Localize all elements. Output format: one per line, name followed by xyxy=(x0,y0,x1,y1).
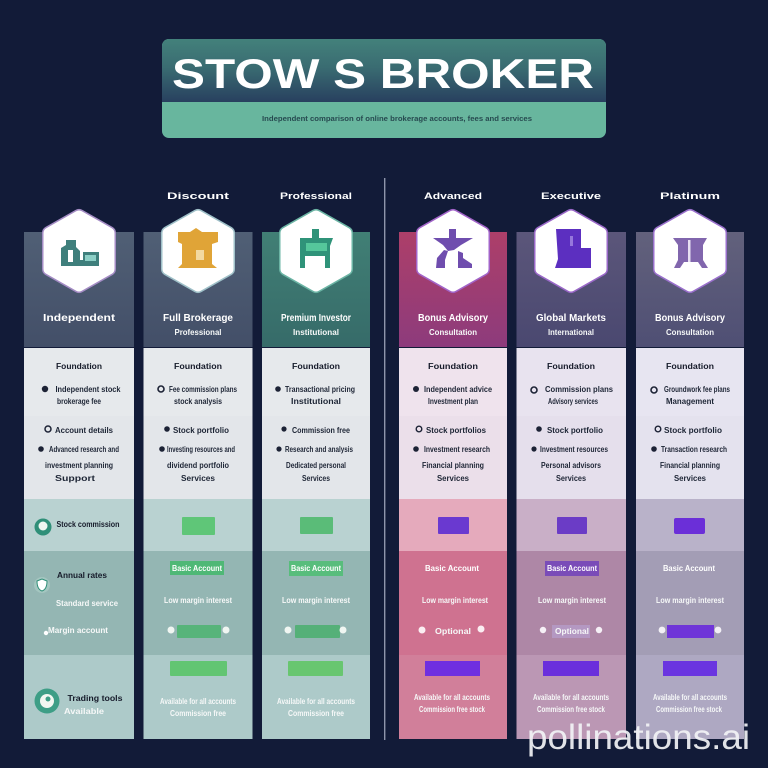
column 2 green badges xyxy=(168,517,230,676)
column 4 header xyxy=(399,232,507,347)
column 5 hexagon icon xyxy=(541,216,601,286)
column 5 badge texts: Commission free stock xyxy=(537,704,605,714)
column 5 texts: International xyxy=(548,327,594,337)
column 4 texts: Stock portfolios xyxy=(426,426,487,435)
column 2 texts: Stock portfolio xyxy=(173,426,229,435)
column 2 row one xyxy=(144,499,252,551)
column 6 badge texts xyxy=(653,564,727,714)
column 6 texts: Bonus Advisory xyxy=(655,313,725,324)
column 3 hexagon icon xyxy=(286,216,346,286)
column 5 texts: Investment resources xyxy=(540,445,608,454)
column 3 badge texts: Commission free xyxy=(288,708,344,718)
column 1 texts: Account details xyxy=(55,426,114,435)
column 4 texts: Independent advice xyxy=(424,385,492,394)
column 2 row two xyxy=(144,551,252,655)
column 1 texts: Trading tools xyxy=(68,694,123,703)
column 4 texts: Consultation xyxy=(429,327,477,337)
column 6 texts xyxy=(651,313,730,483)
column 6 texts: Financial planning xyxy=(660,461,720,470)
column 5 badge texts: Low margin interest xyxy=(538,595,606,605)
column 5 top label: Executive xyxy=(541,191,601,201)
column 3 row one xyxy=(262,499,370,551)
column 2 features xyxy=(144,348,252,499)
column 4 row one xyxy=(399,499,507,551)
column 6 features xyxy=(636,348,744,499)
column 5 texts: Commission plans xyxy=(545,385,614,394)
column 1 texts: Margin account xyxy=(48,625,108,635)
column 5 features xyxy=(516,348,626,499)
column 1 hexagon icon xyxy=(49,216,109,286)
column 4 badge texts: Basic Account xyxy=(425,564,479,573)
column 5 texts: Personal advisors xyxy=(541,461,601,470)
column 3 texts: Institutional xyxy=(293,327,339,337)
column 4 texts xyxy=(413,313,492,483)
column 6 texts: Foundation xyxy=(666,362,714,371)
column 3 badge texts xyxy=(277,564,355,718)
column 6 row one xyxy=(636,499,744,551)
column 4 badge texts xyxy=(414,564,490,714)
column 5 badge texts: Basic Account xyxy=(547,564,597,573)
column 6 badge texts: Basic Account xyxy=(663,564,715,573)
column 3 texts: Foundation xyxy=(292,362,340,371)
column 1 panel xyxy=(24,216,134,739)
column 3 top label: Professional xyxy=(280,191,352,201)
column 1 texts: Stock commission xyxy=(56,520,120,529)
column 1 texts: Independent xyxy=(43,313,116,324)
column 5 header xyxy=(516,232,626,347)
column 6 hexagon icon xyxy=(660,216,720,286)
column 2 texts: dividend portfolio xyxy=(167,461,229,470)
column 5 texts: Global Markets xyxy=(536,313,606,324)
column 6 row three xyxy=(636,655,744,739)
column 2 badge texts: Low margin interest xyxy=(164,595,232,605)
column 1 header xyxy=(24,232,134,347)
column 2 texts: Services xyxy=(181,474,216,483)
column 5 purple badges xyxy=(540,517,602,676)
column 3 panel xyxy=(262,216,370,739)
column 3 badge texts: Low margin interest xyxy=(282,595,350,605)
column 2 texts xyxy=(158,313,237,483)
column 2 top label: Discount xyxy=(167,191,229,201)
column 3 row two xyxy=(262,551,370,655)
column 2 panel xyxy=(144,216,252,739)
column 5 panel xyxy=(516,216,626,739)
column 6 header xyxy=(636,232,744,347)
column 3 texts: Transactional pricing xyxy=(285,385,355,394)
center divider xyxy=(384,178,385,740)
column 1 texts: Foundation xyxy=(56,362,102,371)
column 6 badge texts: Low margin interest xyxy=(656,595,724,605)
column 6 texts: Groundwork fee plans xyxy=(664,385,730,394)
column 3 texts: Commission free xyxy=(292,426,350,435)
column 2 row three xyxy=(144,655,252,739)
column 4 purple badges xyxy=(418,517,484,676)
column 6 row two xyxy=(636,551,744,655)
subtitle: Independent comparison of online brokerage accounts, fees and services xyxy=(262,114,532,123)
column 6 texts: Consultation xyxy=(666,327,714,337)
column 2 texts: Investing resources and xyxy=(167,445,235,454)
column 1 row three xyxy=(24,655,134,739)
column 1 row icons xyxy=(34,518,60,714)
column 1 texts: brokerage fee xyxy=(57,397,101,406)
column 3 texts: Services xyxy=(302,474,330,483)
column 4 texts: Bonus Advisory xyxy=(418,313,488,324)
column 2 badge texts xyxy=(160,564,236,718)
column 6 badge texts: Available for all accounts xyxy=(653,692,727,702)
column 2 badge texts: Available for all accounts xyxy=(160,696,236,706)
column 4 texts: Foundation xyxy=(428,362,478,371)
column 2 texts: stock analysis xyxy=(174,397,222,406)
column 3 badge texts: Available for all accounts xyxy=(277,696,355,706)
column 5 badge texts xyxy=(533,564,609,714)
column 6 top label: Platinum xyxy=(660,191,720,201)
column 3 features xyxy=(262,348,370,499)
column 5 texts: Services xyxy=(556,474,586,483)
column 1 row one xyxy=(24,499,134,551)
column 2 badge texts: Basic Account xyxy=(172,564,222,573)
column 1 texts: Standard service xyxy=(56,598,118,608)
column 5 texts: Advisory services xyxy=(548,397,598,406)
column 2 texts: Foundation xyxy=(174,362,222,371)
title banner xyxy=(162,39,606,138)
column 4 badge texts: Available for all accounts xyxy=(414,692,490,702)
column 4 hexagon icon xyxy=(423,216,483,286)
column 4 panel xyxy=(399,216,507,739)
column 4 texts: Financial planning xyxy=(422,461,484,470)
column 6 texts: Management xyxy=(666,397,714,406)
column 3 texts: Premium Investor xyxy=(281,313,351,324)
column 3 green badges xyxy=(284,517,346,676)
column 3 texts xyxy=(275,313,355,483)
column 2 hexagon icon xyxy=(168,216,228,286)
column 6 badge texts: Commission free stock xyxy=(656,704,722,714)
column 1 texts: Annual rates xyxy=(57,571,108,580)
column 4 texts: Investment plan xyxy=(428,397,478,406)
title: STOW S BROKER xyxy=(172,50,594,97)
column 5 texts: Stock portfolio xyxy=(547,426,603,435)
column 3 texts: Institutional xyxy=(291,397,341,406)
column 4 row three xyxy=(399,655,507,739)
column 1 texts xyxy=(38,313,123,716)
watermark: pollinations.ai xyxy=(527,718,750,757)
column 6 texts: Transaction research xyxy=(661,445,727,454)
column 4 badge texts: Optional xyxy=(435,626,471,636)
column 4 badge texts: Low margin interest xyxy=(422,595,488,605)
column 5 row two xyxy=(516,551,626,655)
column 4 top label: Advanced xyxy=(424,191,482,201)
column 6 panel xyxy=(636,216,744,739)
column 4 row two xyxy=(399,551,507,655)
column 1 texts: Available xyxy=(64,706,104,716)
column 1 texts: investment planning xyxy=(45,461,113,470)
column 6 texts: Services xyxy=(674,474,707,483)
column 4 features xyxy=(399,348,507,499)
column 3 badge texts: Basic Account xyxy=(291,564,341,573)
column 1 texts: Independent stock xyxy=(56,385,121,394)
column 5 badge texts: Available for all accounts xyxy=(533,692,609,702)
column 5 texts: Foundation xyxy=(547,362,595,371)
column 1 texts: Support xyxy=(55,474,95,483)
column 4 texts: Investment research xyxy=(424,445,490,454)
column 6 purple badges xyxy=(659,518,721,676)
column 5 row three xyxy=(516,655,626,739)
column 1 row two xyxy=(24,551,134,655)
column 2 header xyxy=(144,232,252,347)
column 3 texts: Dedicated personal xyxy=(286,461,346,470)
column 6 texts: Stock portfolio xyxy=(664,426,722,435)
column 2 texts: Professional xyxy=(174,327,222,337)
column 2 texts: Full Brokerage xyxy=(163,313,233,324)
column 2 badge texts: Commission free xyxy=(170,708,226,718)
column 4 texts: Services xyxy=(437,474,470,483)
column 5 texts xyxy=(531,313,614,483)
column 3 header xyxy=(262,232,370,347)
column 3 texts: Research and analysis xyxy=(285,445,353,454)
column 5 badge texts: Optional xyxy=(555,626,589,636)
column 4 badge texts: Commission free stock xyxy=(419,704,485,714)
column 1 features xyxy=(24,348,134,499)
column 3 row three xyxy=(262,655,370,739)
column 1 texts: Advanced research and xyxy=(49,445,119,454)
column 5 row one xyxy=(516,499,626,551)
column 2 texts: Fee commission plans xyxy=(169,385,237,394)
